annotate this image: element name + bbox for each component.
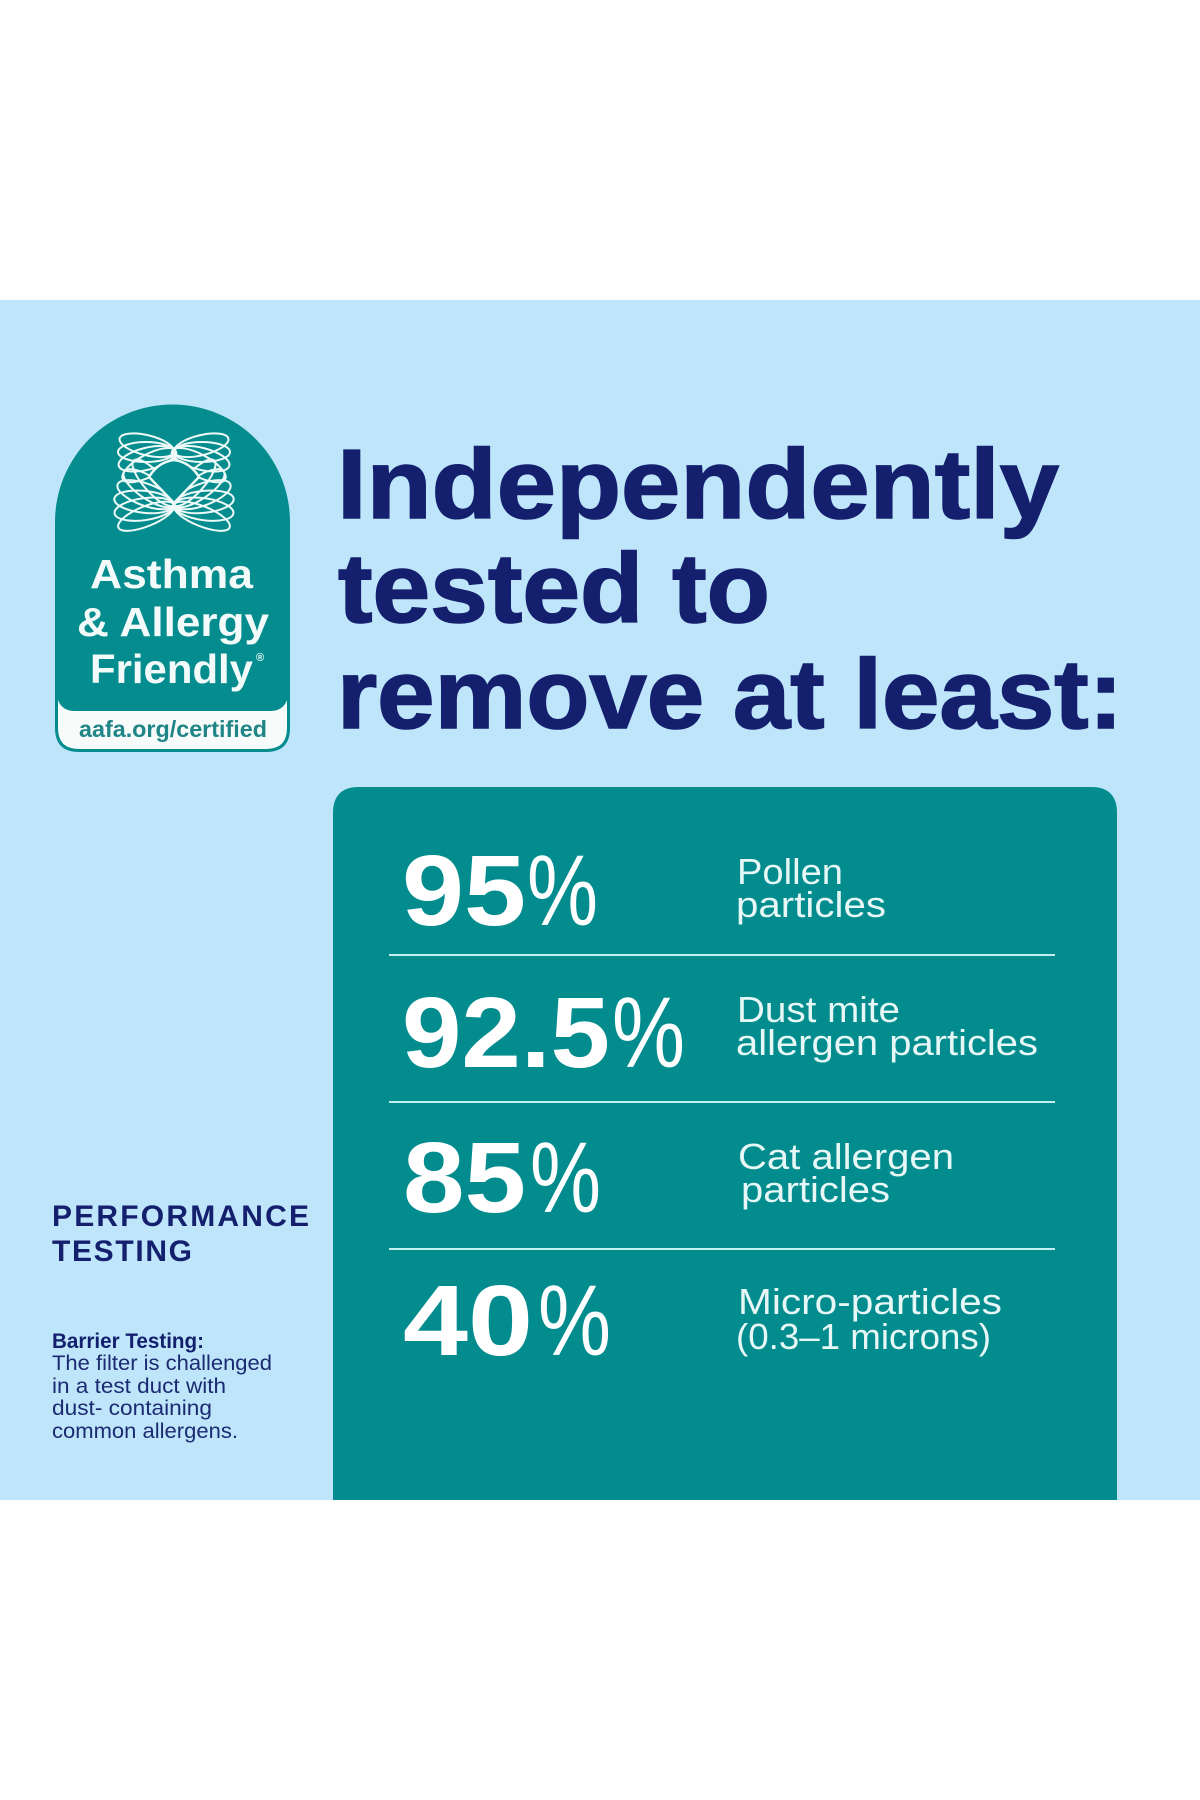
- badge name text: & Allergy: [77, 599, 269, 645]
- heading: remove at least:: [337, 639, 1123, 749]
- row: pollen 95%: Pollen: [737, 851, 843, 892]
- row: micro-particles 40%: [403, 1265, 1002, 1377]
- badge arch shape: [55, 404, 290, 752]
- section title: performance testing: [52, 1200, 309, 1268]
- badge: Asthma & Allergy Friendly certification: [55, 404, 290, 752]
- panel background: [333, 787, 1117, 1500]
- row: dust mite 92.5%: 92.5: [402, 977, 610, 1089]
- section title: performance testing: PERFORMANCE: [52, 1200, 309, 1233]
- text block: barrier testing description: dust- containing: [52, 1397, 212, 1420]
- row: pollen 95%: 95: [402, 835, 526, 947]
- text block: barrier testing description: [52, 1330, 272, 1443]
- badge name text: [77, 551, 269, 692]
- row: pollen 95%: %: [527, 835, 598, 947]
- row: cat allergen 85%: %: [530, 1122, 601, 1234]
- row: dust mite 92.5%: %: [612, 977, 685, 1089]
- row: dust mite 92.5%: Dust mite: [737, 989, 900, 1030]
- row: micro-particles 40%: %: [538, 1265, 611, 1377]
- badge url: aafa.org/certified: [79, 716, 267, 742]
- text block: barrier testing description: in a test duct with: [52, 1375, 226, 1398]
- heading: tested to: [338, 533, 770, 643]
- text block: barrier testing description: Barrier Testing:: [52, 1330, 204, 1353]
- heading: [337, 429, 1123, 749]
- text block: barrier testing description: common allergens.: [52, 1420, 238, 1443]
- row: pollen 95%: particles: [736, 884, 886, 925]
- row: cat allergen 85%: particles: [741, 1169, 890, 1210]
- row: dust mite 92.5%: allergen particles: [736, 1022, 1038, 1063]
- row: dust mite 92.5%: [402, 977, 1038, 1089]
- section title: performance testing: TESTING: [52, 1235, 192, 1268]
- badge name text: Friendly: [90, 646, 253, 692]
- row: cat allergen 85%: [403, 1122, 954, 1234]
- icon: lungs ribbon logo: [113, 429, 235, 537]
- panel: removal percentages: [333, 787, 1117, 1500]
- badge white footer strip: [58, 700, 287, 749]
- row: micro-particles 40%: (0.3–1 microns): [736, 1316, 991, 1357]
- row: micro-particles 40%: 40: [403, 1265, 533, 1377]
- badge name text: ®: [256, 652, 264, 664]
- row: cat allergen 85%: Cat allergen: [738, 1136, 954, 1177]
- text block: barrier testing description: The filter is challenged: [52, 1352, 272, 1375]
- light blue background band: [0, 300, 1200, 1500]
- row: cat allergen 85%: 85: [403, 1122, 526, 1234]
- row: micro-particles 40%: Micro-particles: [738, 1281, 1002, 1322]
- row: pollen 95%: [402, 835, 886, 947]
- badge name text: Asthma: [90, 551, 254, 597]
- heading: Independently: [337, 429, 1059, 539]
